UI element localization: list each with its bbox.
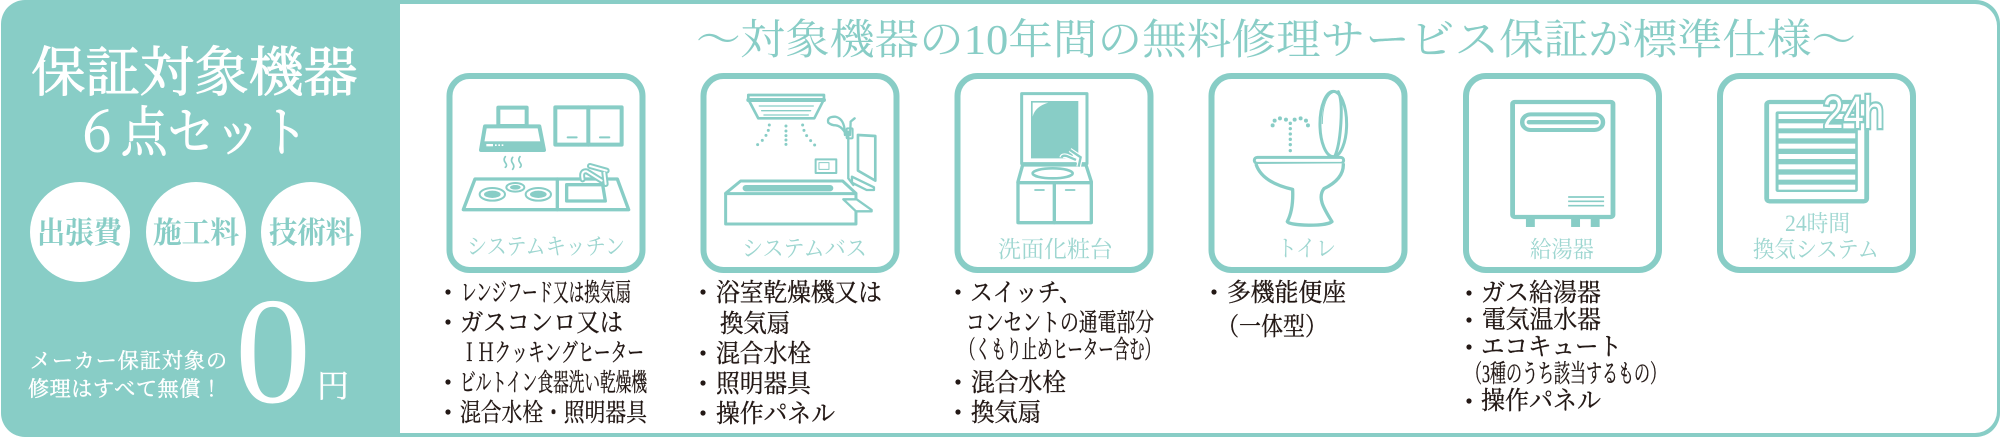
list: toilet items bbox=[1211, 279, 1346, 341]
white content area bbox=[400, 4, 1997, 433]
list: water heater items: エコキュート bbox=[1481, 334, 1622, 361]
label: 洗面化粧台: 洗面化粧台 bbox=[998, 237, 1113, 262]
label: システムキッチン: システムキッチン bbox=[467, 234, 625, 259]
heading: 10-year warranty: ～対象機器の10年間の無料修理サービス保証が標準仕様～ bbox=[696, 17, 1856, 64]
label: 24時間換気システム: 換気システム bbox=[1753, 237, 1879, 262]
label: 給湯器: 給湯器 bbox=[1530, 237, 1594, 262]
list: bath items: 混合水栓 bbox=[716, 340, 811, 368]
list: vanity items bbox=[955, 280, 1160, 427]
list: vanity items: コンセントの通電部分 bbox=[966, 309, 1154, 337]
list: vanity items: 混合水栓 bbox=[971, 369, 1066, 397]
list: vanity items: スイッチ、 bbox=[970, 280, 1082, 307]
icon: ventilation bbox=[1767, 102, 1867, 201]
list: water heater items: ガス給湯器 bbox=[1481, 279, 1601, 307]
price: 0円: 円 bbox=[317, 368, 349, 404]
badge: 出張費: 出張費 bbox=[37, 217, 126, 250]
list: vanity items: 換気扇 bbox=[971, 399, 1041, 427]
list: vanity items: （くもり止めヒーター含む） bbox=[960, 336, 1160, 364]
icon: bath bbox=[726, 95, 875, 224]
badge: 施工料: 施工料 bbox=[153, 217, 239, 250]
icon: vanity bbox=[1018, 94, 1091, 223]
text: maker warranty note: メーカー保証対象の bbox=[30, 349, 227, 373]
card: water heater bbox=[1466, 76, 1659, 270]
card: vanity bbox=[958, 76, 1150, 270]
list: bath items: 操作パネル bbox=[716, 400, 835, 428]
card: system bath bbox=[704, 76, 896, 270]
icon: water heater bbox=[1513, 102, 1613, 227]
label: トイレ: トイレ bbox=[1277, 236, 1336, 261]
badge: 技術料: 技術料 bbox=[269, 217, 354, 250]
heading: 6点セット: ６点セット bbox=[74, 103, 308, 163]
price: 0円 bbox=[235, 267, 349, 435]
list: water heater items: （3種のうち該当するもの） bbox=[1466, 360, 1666, 388]
list: toilet items: 多機能便座 bbox=[1227, 279, 1346, 307]
list: bath items: 換気扇 bbox=[720, 310, 790, 338]
list: bath items: 照明器具 bbox=[716, 371, 812, 398]
list: kitchen items: ＩＨクッキングヒーター bbox=[461, 340, 644, 367]
label: 24時間換気システム: 24時間 bbox=[1785, 211, 1850, 236]
badge: 出張費 bbox=[30, 182, 130, 282]
icon: kitchen bbox=[463, 107, 629, 210]
card: 24h ventilation bbox=[1720, 76, 1913, 270]
panel: left summary bbox=[28, 43, 361, 435]
list: kitchen items bbox=[445, 279, 648, 427]
card: toilet bbox=[1212, 76, 1404, 270]
card: system kitchen bbox=[450, 76, 642, 270]
list: kitchen items: ガスコンロ又は bbox=[460, 310, 623, 337]
heading: 保証対象機器: 保証対象機器 bbox=[31, 43, 358, 103]
list: water heater items bbox=[1466, 279, 1666, 415]
label: 24時間換気システム bbox=[1753, 211, 1879, 262]
text: maker warranty note bbox=[28, 349, 227, 401]
list: bath items bbox=[700, 279, 882, 428]
list: kitchen items: 混合水栓・照明器具 bbox=[460, 399, 648, 427]
icon text: 24h: 24h bbox=[1823, 87, 1884, 138]
badge: 技術料 bbox=[261, 182, 361, 282]
list: kitchen items: ビルトイン食器洗い乾燥機 bbox=[460, 369, 648, 397]
list: water heater items: 操作パネル bbox=[1481, 387, 1601, 415]
price: 0円: 0 bbox=[235, 267, 311, 435]
list: water heater items: 電気温水器 bbox=[1482, 306, 1601, 334]
list: toilet items: （一体型） bbox=[1217, 313, 1327, 341]
icon: toilet bbox=[1254, 91, 1347, 225]
badge: 施工料 bbox=[146, 182, 246, 282]
text: maker warranty note: 修理はすべて無償！ bbox=[28, 377, 222, 401]
list: kitchen items: レンジフード又は換気扇 bbox=[461, 279, 631, 307]
list: bath items: 浴室乾燥機又は bbox=[716, 279, 882, 307]
label: システムバス: システムバス bbox=[742, 236, 867, 261]
